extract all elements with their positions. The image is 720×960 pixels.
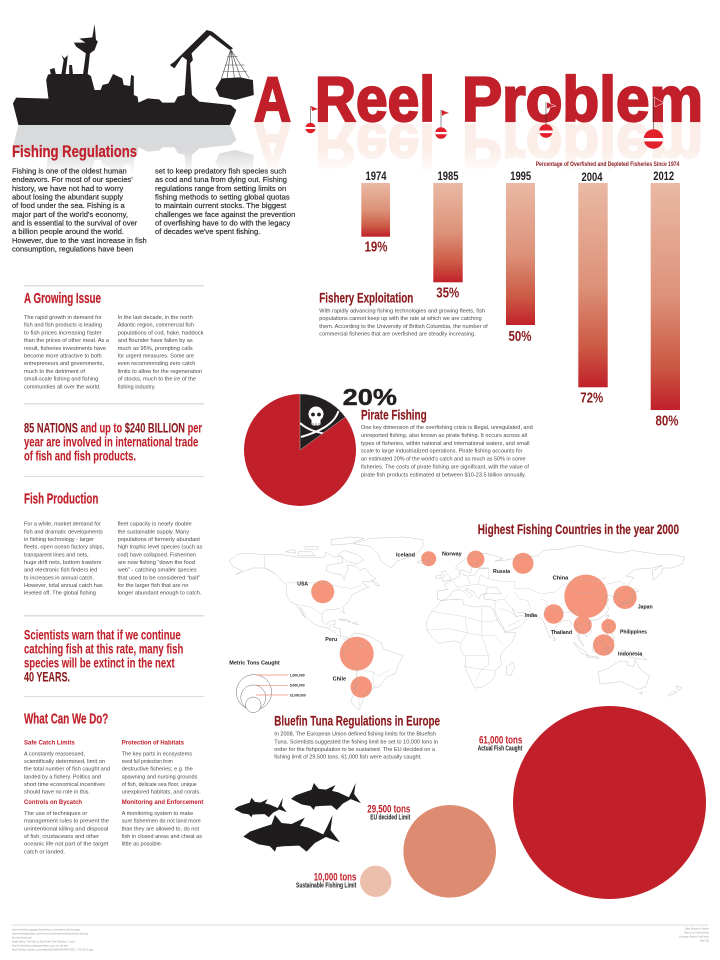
- label: 10,000 tons: [296, 871, 357, 889]
- text block: fish production column 1: fish and dramatic developments: [24, 529, 103, 535]
- text block: fish production column 1: transparent lines and nets,: [24, 552, 89, 558]
- callout: 85 nations: 85 NATIONS and up to $240 BILLION per: [24, 420, 202, 436]
- text block: fish production column 2: fleet capacity is nearly double: [118, 522, 192, 528]
- text block: a growing issue column 1: much to the detriment of: [24, 369, 85, 375]
- text block: fish production column 2: that used to be considered “bait”: [118, 575, 200, 581]
- label: 61,000 tons: Actual Fish Caught: [478, 746, 523, 753]
- bubble: actual catch: [513, 706, 706, 899]
- bubble: Indonesia: [593, 634, 614, 656]
- text block: fish production column 1: For a while, market demand for: [24, 522, 101, 528]
- callout: 85 nations: of fish and fish products.: [24, 448, 136, 464]
- map country labels: Russia: [493, 569, 511, 575]
- map country labels: Iceland: [396, 552, 415, 558]
- text block: fishing regulations column 2: regulations range from setting limits on: [155, 184, 286, 193]
- footer: credits: [679, 928, 710, 942]
- text block: controls on bycatch: unintentional killing and disposal: [24, 826, 108, 832]
- title: Reel: [315, 65, 435, 135]
- label: 29,500 tons: EU decided Limit: [370, 814, 411, 821]
- map legend: metric tons caught: 5,000,000: [290, 684, 305, 688]
- bubble: Norway: [467, 551, 484, 568]
- label: 10,000 tons: Sustainable Fishing Limit: [296, 882, 357, 889]
- bar 2004: [578, 172, 608, 407]
- map bubbles: catch per country: [311, 551, 637, 698]
- label: 61,000 tons: [478, 734, 523, 753]
- title: A: [254, 65, 291, 135]
- text block: safe catch limits: short time economical incentives: [24, 782, 105, 788]
- label: 61,000 tons: 61,000 tons: [479, 734, 522, 746]
- text block: fishing regulations column 1: major part of the world's economy,: [12, 210, 128, 219]
- footer: credits: Information Design, Final Project: [679, 936, 709, 938]
- text block: a growing issue column 1: [24, 315, 110, 390]
- text block: fish production column 1: [24, 522, 104, 597]
- footer: sources: http://media.nature.com/original/2008/04/24/08-7821_716_DC2.jpg: [12, 948, 94, 952]
- text block: fishing regulations column 1: a billion people around the world.: [12, 227, 124, 236]
- bar 1985: 35%: [436, 285, 459, 301]
- map country labels: USA: [297, 582, 308, 588]
- text block: bluefin tuna: order for the fishpopulation to be sustained. The EU decided on a: [274, 747, 436, 753]
- text block: fish production column 1: huge drift nets, bottom trawlers: [24, 560, 101, 566]
- text block: controls on bycatch: management rules to prevent the: [24, 819, 109, 825]
- footer: sources: http://www.theguardian.com/environment/interactive/fishing-stocks-data.png: [12, 932, 89, 936]
- icon: tuna top: [291, 783, 361, 810]
- map legend: metric tons caught: 1,000,000: [290, 674, 305, 678]
- bar 1995: 50%: [508, 329, 532, 345]
- text block: a growing issue column 1: entrepreneurs and governments,: [24, 361, 104, 367]
- title: Problem: [462, 65, 703, 135]
- text block: a growing issue column 2: [118, 315, 203, 390]
- text block: bluefin tuna: In 2008, The European Union defined fishing limits for the Bluefish: [274, 732, 436, 738]
- text block: fish production column 2: for the larger fish that are no: [118, 583, 188, 589]
- map country labels: [297, 552, 653, 683]
- text block: fishery exploitation: [319, 308, 488, 338]
- bubble: Philippines: [601, 619, 616, 634]
- title reflection: [254, 110, 703, 180]
- map country labels: Indonesia: [618, 651, 643, 657]
- text block: fishing regulations column 2: fishing methods to setting global quotas: [155, 192, 290, 202]
- text block: a growing issue column 1: communities all over the world.: [24, 384, 101, 390]
- footer: sources: [12, 928, 94, 952]
- text block: fish production column 2: high trophic level species (such as: [118, 545, 202, 551]
- text block: pirate fishing: types of fisheries, within national and international waters, and small: [361, 441, 530, 447]
- heading: fishing regulations: Fishing Regulations: [12, 143, 137, 161]
- heading: fishery exploitation: Fishery Exploitation: [319, 290, 413, 306]
- text block: fishing regulations column 1: Fishing is one of the oldest human: [12, 166, 127, 176]
- text block: a growing issue column 2: and flounder have fallen by as: [118, 338, 193, 344]
- text block: pirate fishing: scale to large industrialized operations. Pirate fishing accounts for: [361, 449, 523, 455]
- text block: protection of habitats: unexplored habitats, and corals.: [122, 790, 201, 796]
- bubble: Thailand: [574, 616, 592, 634]
- text block: safe catch limits: the total number of fish caught and: [24, 767, 110, 773]
- title: [254, 65, 703, 135]
- text block: controls on bycatch: The use of techniques or: [24, 811, 87, 817]
- text block: fishery exploitation: With rapidly advancing fishing technologies and growing fleets, fish: [319, 308, 485, 314]
- footer: sources: http://overfishing.org/pages/fundfishing_is_everywhere.php?cnt=page: [12, 928, 81, 932]
- text block: protection of habitats: of fish, delicate sea floor, unique: [122, 782, 197, 788]
- bar 1995: 1995: [510, 171, 532, 183]
- text block: safe catch limits: should have no role in this.: [24, 790, 90, 796]
- map country labels: Thailand: [551, 630, 572, 636]
- text block: pirate fishing: unreported fishing, also known as pirate fishing. It occurs across all: [361, 433, 527, 439]
- text block: bluefin tuna: Tuna. Scientists suggested the fishing limit be set to 10,000 tons in: [274, 739, 438, 745]
- bubble: Peru: [340, 637, 374, 671]
- title reflection: Reel: [315, 110, 435, 180]
- text block: safe catch limits: Safe Catch Limits: [24, 739, 75, 746]
- text block: a growing issue column 1: fish and fish products is leading: [24, 323, 102, 329]
- ship reflection: [13, 125, 254, 170]
- icon: fishing bobber 2: [435, 110, 449, 139]
- text block: monitoring and enforcement: Monitoring and Enforcement: [122, 799, 204, 806]
- text block: fish production column 2: cod) have collapsed. Fishermen: [118, 552, 196, 558]
- map legend: metric tons caught: 10,000,000: [290, 694, 306, 698]
- label: 10,000 tons: 10,000 tons: [314, 871, 356, 883]
- text block: a growing issue column 2: limits to allow for the regeneration: [118, 369, 202, 375]
- bubble: USA: [311, 580, 334, 603]
- bubble: Russia: [512, 553, 534, 574]
- heading: pirate fishing: Pirate Fishing: [361, 406, 427, 422]
- footer: sources: http://www.fishwatch.gov/: [12, 936, 32, 940]
- heading: bluefin tuna regulations: Bluefin Tuna Regulations in Europe: [274, 712, 440, 728]
- text block: a growing issue column 1: than the prices of other meat. As a: [24, 338, 110, 344]
- ship with crane and net: [13, 24, 254, 125]
- map legend: metric tons caught: Metric Tons Caught: [229, 661, 280, 667]
- text block: fishing regulations column 2: of overfishing have to do with the legacy: [155, 218, 290, 228]
- bar 2012: 2012: [653, 171, 674, 183]
- text block: fishery exploitation: them. According to the University of British Columbia, the number of: [319, 324, 488, 330]
- text block: fish production column 1: in fishing technology - larger: [24, 537, 94, 543]
- text block: fish production column 1: to increases in annual catch.: [24, 575, 94, 581]
- map legend: metric tons caught: [229, 661, 306, 713]
- icon: skull and crossed swords: [300, 406, 338, 437]
- text block: monitoring and enforcement: than they are allowed to, do not: [122, 826, 199, 832]
- text block: safe catch limits: A constantly reassessed,: [24, 751, 85, 757]
- text block: fish production column 2: are now fishing “down the food: [118, 560, 195, 566]
- text block: fishery exploitation: populations cannot keep up with the rate at which we are catching: [319, 316, 482, 322]
- bar 1974: [361, 171, 390, 256]
- title reflection: A: [254, 110, 291, 180]
- text block: controls on bycatch: catch or landed.: [24, 849, 65, 855]
- bubble: India: [544, 604, 564, 624]
- text block: protection of habitats: destructive fisheries; e.g. the: [122, 767, 193, 773]
- text block: protection of habitats: Protection of Habitats: [122, 739, 184, 746]
- icon: tuna left: [234, 798, 287, 817]
- map country labels: Philippines: [620, 630, 647, 636]
- text block: fishing regulations column 1: and is essential to the survival of over: [12, 218, 138, 228]
- text block: controls on bycatch: Controls on Bycatch: [24, 799, 82, 806]
- text block: fishing regulations column 1: consumption, regulations have been: [12, 244, 133, 254]
- text block: fish production column 1: leveled off. The global fishing: [24, 591, 96, 597]
- text block: fish production column 2: populations of formerly abundant: [118, 537, 200, 543]
- text block: a growing issue column 1: result, fisheries investments have: [24, 346, 106, 352]
- text block: fishing regulations column 2: [155, 166, 295, 236]
- text block: safe catch limits: scientifically determined, limit on: [24, 759, 105, 765]
- text block: safe catch limits: landed by a fishery. Politics and: [24, 774, 101, 780]
- text block: fish production column 2: longer abundant enough to catch.: [118, 591, 202, 597]
- bubble: Chile: [351, 676, 372, 698]
- text block: monitoring and enforcement: fish in closed areas and cheat as: [122, 834, 202, 840]
- text block: protection of habitats: need full protection from: [122, 759, 173, 765]
- text block: protection of habitats: The key parts in ecosystems: [122, 751, 192, 757]
- text block: fishing regulations column 1: [12, 166, 147, 254]
- text block: bluefin tuna: [274, 732, 438, 761]
- text block: controls on bycatch: of fish, crustaceans and other: [24, 834, 99, 840]
- chart caption: Percentage of Overfished and Depleted Fisheries Since 1974: [536, 161, 680, 168]
- bubble: Iceland: [421, 551, 436, 566]
- text block: pirate fishing: pirate fish products estimated at between $10-23.5 billion annually.: [361, 472, 526, 478]
- text block: fishing regulations column 2: set to keep predatory fish species such: [155, 166, 286, 176]
- text block: fishing regulations column 2: challenges we face against the prevention: [155, 210, 295, 219]
- title reflection: Problem: [462, 110, 703, 180]
- text block: a growing issue column 1: The rapid growth in demand for: [24, 315, 102, 321]
- bar 1995: [506, 171, 535, 345]
- map country labels: Peru: [325, 637, 337, 643]
- world map outline: [229, 537, 685, 710]
- heading: what can we do: What Can We Do?: [24, 710, 108, 727]
- pie chart: pirate fishing share: [244, 394, 356, 506]
- bar chart: overfished fisheries: [361, 171, 680, 430]
- map country labels: Norway: [442, 552, 462, 558]
- text block: controls on bycatch: oceanic life not part of the target: [24, 842, 109, 848]
- bubble: China: [564, 575, 608, 618]
- text block: fish production column 2: web” - catching smaller species: [117, 568, 197, 574]
- text block: fishing regulations column 2: to maintain current stocks. The biggest: [155, 201, 287, 210]
- bubble: sustainable limit: [360, 866, 391, 897]
- map country labels: Chile: [333, 677, 346, 683]
- label: 29,500 tons: [367, 803, 411, 821]
- text block: fishing regulations column 1: about losing the abundant supply: [12, 192, 123, 202]
- text block: fish production column 1: and electronic fish finders led: [24, 568, 97, 574]
- bar 2004: 2004: [582, 172, 603, 184]
- footer: credits: School of Visual Arts: [684, 932, 710, 934]
- label: 29,500 tons: 29,500 tons: [367, 803, 410, 815]
- text block: monitoring and enforcement: little as possible.: [122, 842, 163, 848]
- heading: fish production: Fish Production: [24, 491, 98, 508]
- text block: pirate fishing: an estimated 20% of the world's catch and as much as 50% in some: [361, 457, 526, 463]
- callout: scientists warn: [24, 627, 183, 685]
- text block: a growing issue column 2: of stocks, much to the ire of the: [118, 377, 196, 383]
- text block: fishing regulations column 1: endeavors. For most of our species': [12, 175, 133, 184]
- text block: pirate fishing: [361, 425, 533, 478]
- icon: tuna large: [243, 815, 340, 852]
- heading: a growing issue: A Growing Issue: [24, 290, 101, 307]
- footer: credits: May 2012: [700, 940, 709, 942]
- text block: fishing regulations column 1: However, due to the vast increase in fish: [12, 236, 147, 245]
- icon: fishing bobber 1: [305, 106, 318, 133]
- bar 2004: 72%: [580, 391, 603, 407]
- text block: a growing issue column 2: even recommending zero catch: [118, 361, 195, 367]
- icon: fishing bobber 3: [539, 102, 556, 138]
- text block: a growing issue column 2: for urgent measures. Some are: [118, 354, 194, 360]
- text block: a growing issue column 1: become more attractive to both: [24, 354, 102, 360]
- footer: credits: Data Design & Visuals: [685, 928, 710, 930]
- bar 1985: [433, 171, 463, 301]
- text block: a growing issue column 1: to fish prices increasing faster: [24, 330, 102, 336]
- bar 1974: 19%: [364, 240, 388, 256]
- text block: controls on bycatch: [24, 799, 109, 855]
- text block: a growing issue column 2: much as 95%, prompting calls: [118, 346, 193, 352]
- text block: monitoring and enforcement: sure fishermen do not land more: [122, 819, 201, 825]
- text block: monitoring and enforcement: A monitoring system to make: [122, 811, 193, 817]
- callout: scientists warn: species will be extinct in the next: [24, 655, 175, 671]
- text block: fishing regulations column 2: as cod and tuna from dying out. Fishing: [155, 175, 287, 184]
- text block: bluefin tuna: fishing limit of 29,500 tons. 61,000 fish were actually caught.: [274, 755, 422, 761]
- text block: monitoring and enforcement: [122, 799, 204, 848]
- text block: a growing issue column 1: small-scale fishing and fishing: [24, 377, 98, 383]
- text block: a growing issue column 2: populations of cod, hake, haddock: [118, 330, 203, 336]
- bar 1985: 1985: [438, 171, 459, 183]
- text block: a growing issue column 2: In the last decade, in the north: [118, 315, 193, 321]
- bubble: EU limit: [403, 805, 496, 898]
- callout: scientists warn: catching fish at this rate, many fish: [24, 641, 183, 657]
- footer: sources: Illegal fishing: The Fight to Stop Pirate Fish Poachers, 1 more: [12, 940, 76, 944]
- callout: scientists warn: 40 YEARS.: [24, 669, 70, 685]
- callout: scientists warn: Scientists warn that if we continue: [24, 627, 181, 643]
- text block: fish production column 1: fleets, open ocean factory ships,: [24, 545, 104, 551]
- text block: a growing issue column 2: Atlantic region, commercial fish: [118, 323, 194, 329]
- callout: 85 nations: [24, 420, 202, 464]
- pie chart label: 20%: 20%: [343, 384, 397, 410]
- text block: fishery exploitation: commercial fisheries that are overfished are steadily increasing.: [319, 332, 476, 338]
- map country labels: China: [553, 575, 569, 581]
- map country labels: Japan: [638, 605, 653, 611]
- text block: fishing regulations column 2: of decades we've spent fishing.: [155, 227, 260, 236]
- text block: protection of habitats: spawning and nursing grounds: [122, 774, 197, 780]
- bar 2012: 80%: [656, 414, 679, 430]
- text block: protection of habitats: [122, 739, 201, 796]
- bar 2012: [651, 171, 680, 430]
- bubble: Japan: [613, 586, 637, 609]
- callout: 85 nations: year are involved in international trade: [24, 434, 198, 450]
- text block: pirate fishing: fisheries. The costs of pirate fishing are significant, with the value of: [361, 464, 529, 470]
- text block: fishing regulations column 1: of food under the sea. Fishing is a: [12, 201, 125, 210]
- footer: sources: http://overfishing.org/pages/what_can_we_do.php: [12, 944, 69, 948]
- text block: safe catch limits: [24, 739, 110, 796]
- icon: fishing bobber 4: [644, 97, 664, 149]
- bar 1974: 1974: [366, 171, 387, 183]
- text block: fish production column 2: [117, 522, 202, 597]
- text block: pirate fishing: One key dimension of the overfishing crisis is illegal, unregulated, and: [361, 425, 533, 431]
- map country labels: India: [525, 613, 538, 619]
- text block: fish production column 2: the sustainable supply. Many: [118, 529, 189, 535]
- text block: fish production column 1: However, total annual catch has: [24, 583, 103, 589]
- text block: a growing issue column 2: fishing industry.: [118, 384, 156, 390]
- text block: fishing regulations column 1: history, we have not had to worry: [12, 184, 123, 193]
